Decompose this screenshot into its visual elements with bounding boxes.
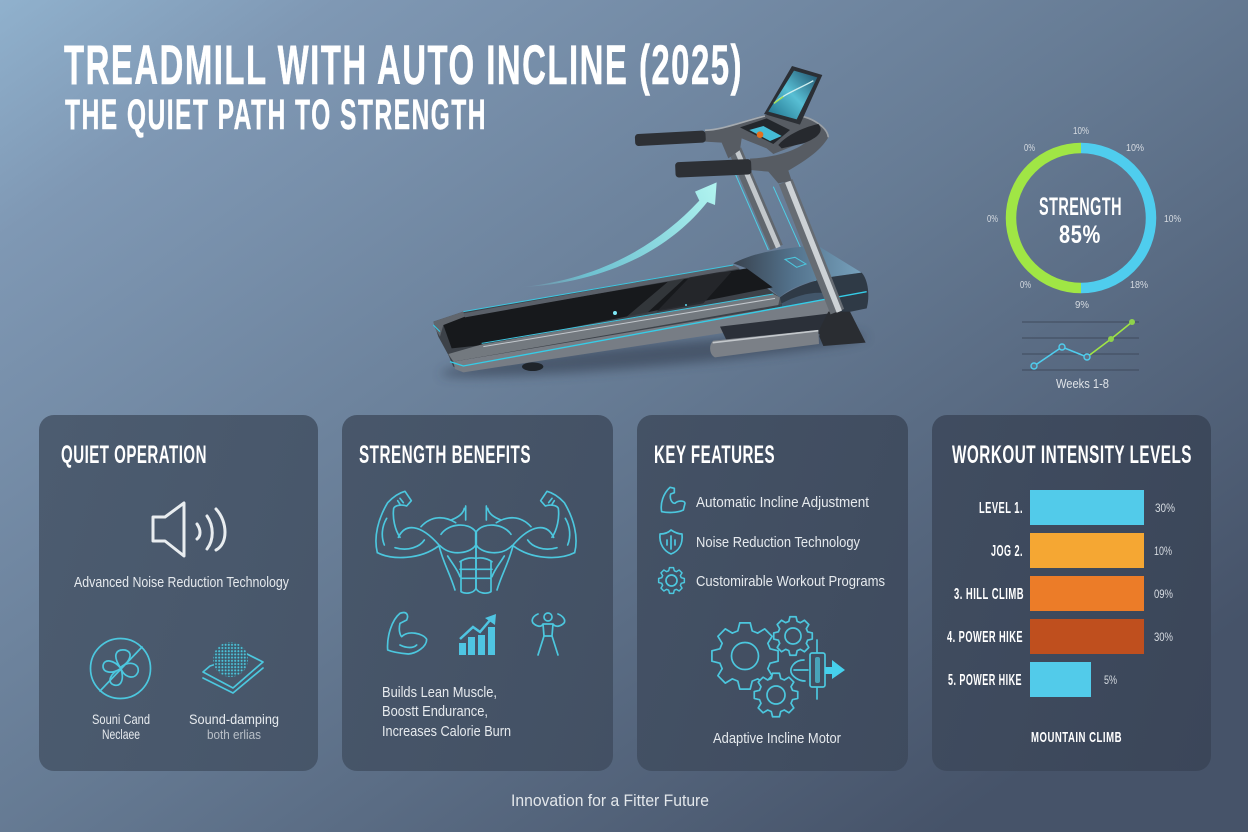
caption: mountain climb: MOUNTAIN CLIMB xyxy=(1031,729,1122,746)
bar: power hike 5: 5. POWER HIKE xyxy=(948,672,1022,689)
deck body xyxy=(433,265,782,372)
gauge tick labels xyxy=(987,126,1181,311)
feature: automatic incline: Automatic Incline Adjustment xyxy=(696,494,870,511)
icon: crossed-out fan xyxy=(90,638,150,698)
caption: foam xyxy=(189,711,279,742)
icon: gears and motor xyxy=(712,617,845,717)
gauge tick labels: 10% xyxy=(1126,143,1144,154)
icon: arm xyxy=(661,487,685,512)
gauge label: STRENGTH xyxy=(1039,193,1122,221)
icon: settings gear xyxy=(659,568,684,593)
bar chart xyxy=(947,490,1175,697)
progress line chart xyxy=(1022,319,1139,391)
icon: growth bars xyxy=(459,614,496,655)
bar: power hike 4 xyxy=(947,619,1173,654)
bar: power hike 4: 4. POWER HIKE xyxy=(947,629,1023,646)
footer tagline: Innovation for a Fitter Future xyxy=(511,791,709,810)
heading: key features: KEY FEATURES xyxy=(654,441,775,469)
text: benefits: Increases Calorie Burn xyxy=(382,723,511,740)
treadmill illustration xyxy=(433,66,868,385)
base foot xyxy=(710,330,819,357)
incline arrow xyxy=(520,182,717,287)
gauge value: 85% xyxy=(1059,221,1101,249)
gauge tick labels: 18% xyxy=(1130,280,1148,291)
subtitle: THE QUIET PATH TO STRENGTH xyxy=(65,91,487,139)
panel: workout intensity levels xyxy=(932,415,1211,771)
bar: jog 2 xyxy=(991,533,1172,568)
bar: jog 2: JOG 2. xyxy=(991,543,1023,560)
feature: noise reduction: Noise Reduction Technology xyxy=(696,534,860,551)
bar: power hike 4: 30% xyxy=(1154,630,1173,644)
gauge tick labels: 10% xyxy=(1164,214,1181,225)
icon: muscular torso xyxy=(376,491,576,593)
caption: foam: both erlias xyxy=(207,727,261,742)
caption: adaptive motor: Adaptive Incline Motor xyxy=(713,730,841,747)
bar: hill climb xyxy=(954,576,1173,611)
bar: power hike 5 xyxy=(948,662,1117,697)
text: noise reduction: Advanced Noise Reduction Technology xyxy=(74,574,289,591)
icon: noise shield xyxy=(660,530,682,554)
bar: hill climb: 09% xyxy=(1154,587,1173,601)
gauge tick labels: 9% xyxy=(1075,300,1089,311)
console screen xyxy=(764,66,822,125)
icon: sound-damping foam xyxy=(203,642,263,693)
caption: fan: Neclaee xyxy=(102,726,140,742)
gauge tick labels: 10% xyxy=(1073,126,1089,137)
gauge tick labels: 0% xyxy=(1024,143,1035,154)
panel: strength benefits xyxy=(342,415,613,771)
strength ring gauge xyxy=(987,126,1181,311)
panel: quiet operation xyxy=(39,415,318,771)
bar: level 1: LEVEL 1. xyxy=(979,500,1023,517)
heading: strength benefits: STRENGTH BENEFITS xyxy=(359,441,531,469)
bar: power hike 5: 5% xyxy=(1104,673,1117,687)
text: benefits: Builds Lean Muscle, xyxy=(382,684,497,701)
bar: level 1: 30% xyxy=(1155,501,1175,515)
panel: key features xyxy=(637,415,908,771)
icon: flexing figure xyxy=(532,613,565,655)
bar: hill climb: 3. HILL CLIMB xyxy=(954,586,1024,603)
heading: quiet operation: QUIET OPERATION xyxy=(61,441,207,469)
caption: foam: Sound-damping xyxy=(189,711,279,727)
caption: fan xyxy=(92,711,150,742)
handlebars xyxy=(705,115,828,183)
title: TREADMILL WITH AUTO INCLINE (2025) xyxy=(64,33,743,96)
running belt xyxy=(443,268,773,348)
text: benefits: Boostt Endurance, xyxy=(382,703,488,720)
gauge tick labels: 0% xyxy=(1020,280,1031,291)
feature: workout programs: Customirable Workout Programs xyxy=(696,573,885,590)
icon: speaker xyxy=(153,503,225,556)
gauge tick labels: 0% xyxy=(987,214,998,225)
bar: level 1 xyxy=(979,490,1175,525)
caption: fan: Souni Cand xyxy=(92,711,150,727)
bar: jog 2: 10% xyxy=(1154,544,1172,558)
icon: flexed arm xyxy=(388,613,427,654)
chart axis label: Weeks 1-8 xyxy=(1056,376,1109,391)
text: benefits xyxy=(382,684,511,740)
